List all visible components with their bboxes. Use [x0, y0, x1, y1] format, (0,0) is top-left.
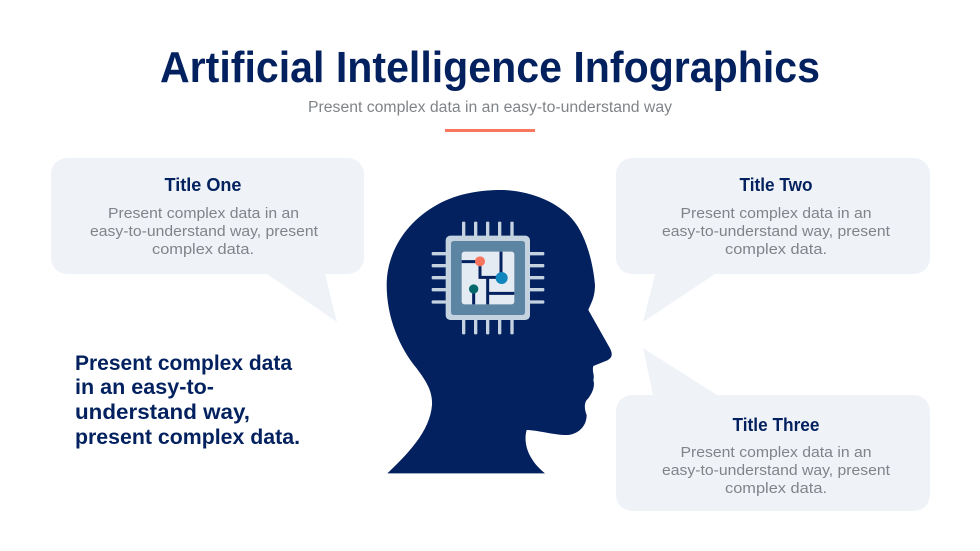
text: title two body: easy-to-understand way, present	[662, 223, 891, 240]
text block: left statement: understand way,	[75, 401, 250, 424]
accent line	[445, 129, 535, 132]
text: title one body: easy-to-understand way, present	[90, 223, 319, 240]
title: Artificial Intelligence Infographics	[160, 43, 820, 92]
subtitle: Present complex data in an easy-to-understand way	[308, 99, 672, 116]
text block: left statement	[75, 352, 300, 449]
text: title two body	[662, 205, 891, 258]
text: title one body: Present complex data in an	[108, 205, 299, 222]
text: title three body	[662, 444, 891, 497]
text: title three body: complex data.	[725, 480, 827, 497]
text block: left statement: present complex data.	[75, 426, 300, 449]
text: title three body: easy-to-understand way, present	[662, 462, 891, 479]
panel: title two callout	[616, 158, 930, 322]
heading: title one: Title One	[164, 174, 242, 195]
panel: title three callout	[616, 348, 930, 511]
text: title two body: Present complex data in an	[680, 205, 872, 222]
icon: head silhouette	[387, 190, 612, 473]
text: title two body: complex data.	[725, 241, 827, 258]
heading: title two: Title Two	[740, 174, 812, 195]
text: title one body	[90, 205, 319, 258]
text: title three body: Present complex data in an	[680, 444, 872, 461]
text: title one body: complex data.	[152, 241, 254, 258]
text block: left statement: in an easy-to-	[75, 376, 214, 399]
icon: microchip	[432, 222, 544, 334]
panel: title one callout	[51, 158, 364, 322]
heading: title three: Title Three	[732, 414, 820, 435]
text block: left statement: Present complex data	[75, 352, 292, 375]
